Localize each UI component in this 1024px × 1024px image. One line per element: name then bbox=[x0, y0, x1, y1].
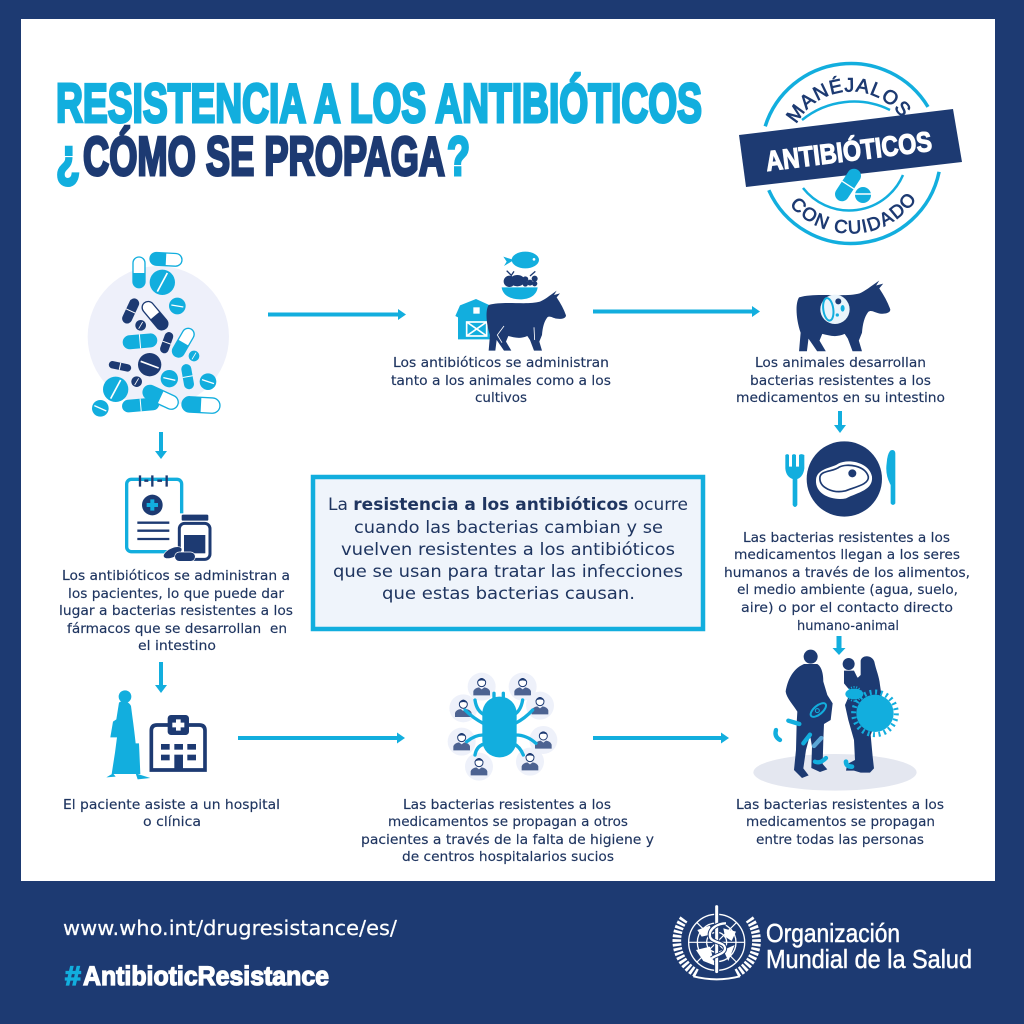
text: antibiotics given to patients: fármacos que se desarrollan en bbox=[67, 622, 287, 637]
arrow: cow to plate bbox=[834, 411, 846, 433]
stamp: manéjalos antibióticos con cuidado: ANTIBIÓTICOS bbox=[764, 126, 933, 177]
icon: cow with bacteria in gut bbox=[797, 280, 890, 351]
text: resistant bacteria reach humans: medicamentos llegan a los seres bbox=[734, 548, 960, 563]
text: bacteria spread to other patients: Las bacterias resistentes a los bbox=[403, 798, 611, 813]
icon: plate with meat and cutlery bbox=[785, 441, 895, 517]
callout: definition of antibiotic resistance: La resistencia a los antibióticos ocurre bbox=[328, 495, 688, 515]
arrow: clipboard to hospital bbox=[155, 662, 167, 693]
footer url: www.who.int/drugresistance/es/ bbox=[63, 916, 397, 940]
text: antibiotics given to animals and crops: cultivos bbox=[475, 391, 527, 406]
callout: definition of antibiotic resistance: que se usan para tratar las infecciones bbox=[333, 562, 683, 582]
title bbox=[56, 72, 702, 188]
text: bacteria spread to other patients: de centros hospitalarios sucios bbox=[402, 850, 614, 865]
arrow: pills to clipboard bbox=[155, 432, 167, 459]
callout: definition of antibiotic resistance: vuelven resistentes a los antibióticos bbox=[341, 540, 675, 560]
title: RESISTENCIA A LOS ANTIBIÓTICOS bbox=[56, 72, 702, 134]
title: CÓMO SE PROPAGA bbox=[83, 125, 445, 187]
text: bacteria spread to other patients bbox=[361, 798, 654, 865]
text: resistant bacteria reach humans: humanos a través de los alimentos, bbox=[724, 566, 970, 581]
title: ¿ bbox=[56, 126, 80, 188]
icon: bug among patients bbox=[448, 673, 557, 781]
text: resistant bacteria reach humans: humano-animal bbox=[797, 619, 899, 634]
text: animals develop resistant bacteria bbox=[736, 356, 945, 406]
icon: family with bacteria bbox=[753, 650, 917, 791]
text: antibiotics given to patients: el intestino bbox=[138, 639, 216, 654]
text: patient goes to hospital bbox=[63, 798, 280, 830]
text: animals develop resistant bacteria: bacterias resistentes a los bbox=[750, 374, 931, 389]
callout: definition of antibiotic resistance: que estas bacterias causan. bbox=[382, 584, 635, 604]
text: bacteria spread among all people: Las bacterias resistentes a los bbox=[736, 798, 944, 813]
footer hashtag: # bbox=[65, 961, 81, 991]
text: Organización Mundial de la Salud: Organización bbox=[766, 918, 900, 948]
text: Organización Mundial de la Salud bbox=[766, 918, 972, 974]
text: bacteria spread among all people: medicamentos se propagan bbox=[746, 815, 935, 830]
icon: patient walking and hospital bbox=[106, 690, 205, 779]
text: antibiotics given to animals and crops bbox=[391, 356, 611, 406]
arrow: humans bbox=[832, 636, 846, 655]
title: ? bbox=[447, 125, 470, 187]
footer hashtag: AntibioticResistance bbox=[83, 961, 329, 991]
text: patient goes to hospital: o clínica bbox=[143, 815, 201, 830]
callout: definition of antibiotic resistance: cuando las bacterias cambian y se bbox=[354, 518, 663, 538]
text: Organización Mundial de la Salud: Mundial de la Salud bbox=[766, 944, 972, 974]
text: animals develop resistant bacteria: medicamentos en su intestino bbox=[736, 391, 945, 406]
text: antibiotics given to patients bbox=[59, 569, 293, 654]
text: resistant bacteria reach humans: el medio ambiente (agua, suelo, bbox=[737, 583, 958, 598]
stamp: manéjalos antibióticos con cuidado: MANÉJALOS bbox=[786, 76, 910, 124]
arrow: pills to farm bbox=[268, 309, 406, 320]
text: antibiotics given to patients: lugar a bacterias resistentes a los bbox=[59, 604, 293, 619]
text: antibiotics given to animals and crops: Los antibióticos se administran bbox=[393, 356, 609, 371]
arrow: patients to people bbox=[593, 732, 729, 744]
text: patient goes to hospital: El paciente asiste a un hospital bbox=[63, 798, 280, 813]
text: animals develop resistant bacteria: Los animales desarrollan bbox=[755, 356, 926, 371]
text: bacteria spread among all people bbox=[736, 798, 944, 848]
text: bacteria spread among all people: entre todas las personas bbox=[756, 833, 924, 848]
arrow: hospital to patients bbox=[238, 732, 405, 744]
arrow: farm to intestine bbox=[593, 306, 760, 317]
text: resistant bacteria reach humans bbox=[724, 531, 970, 634]
text: resistant bacteria reach humans: aire) o por el contacto directo bbox=[741, 601, 953, 616]
icon: clipboard with medicine bbox=[127, 475, 213, 562]
logo: World Health Organization emblem bbox=[677, 907, 756, 979]
callout: definition of antibiotic resistance bbox=[313, 477, 703, 629]
icon: pile of pills bbox=[88, 252, 229, 417]
text: bacteria spread to other patients: medicamentos se propagan a otros bbox=[388, 815, 628, 830]
stamp: manéjalos antibióticos con cuidado: CON CUIDADO bbox=[792, 194, 914, 234]
text: antibiotics given to animals and crops: tanto a los animales como a los bbox=[391, 374, 611, 389]
text: antibiotics given to patients: Los antibióticos se administran a bbox=[62, 569, 290, 584]
stamp: manéjalos antibióticos con cuidado bbox=[739, 62, 962, 246]
icon: farm, food and cow bbox=[455, 252, 566, 351]
text: bacteria spread to other patients: pacientes a través de la falta de higiene y bbox=[361, 833, 654, 848]
text: antibiotics given to patients: los pacientes, lo que puede dar bbox=[68, 587, 285, 602]
text: resistant bacteria reach humans: Las bacterias resistentes a los bbox=[743, 531, 950, 546]
